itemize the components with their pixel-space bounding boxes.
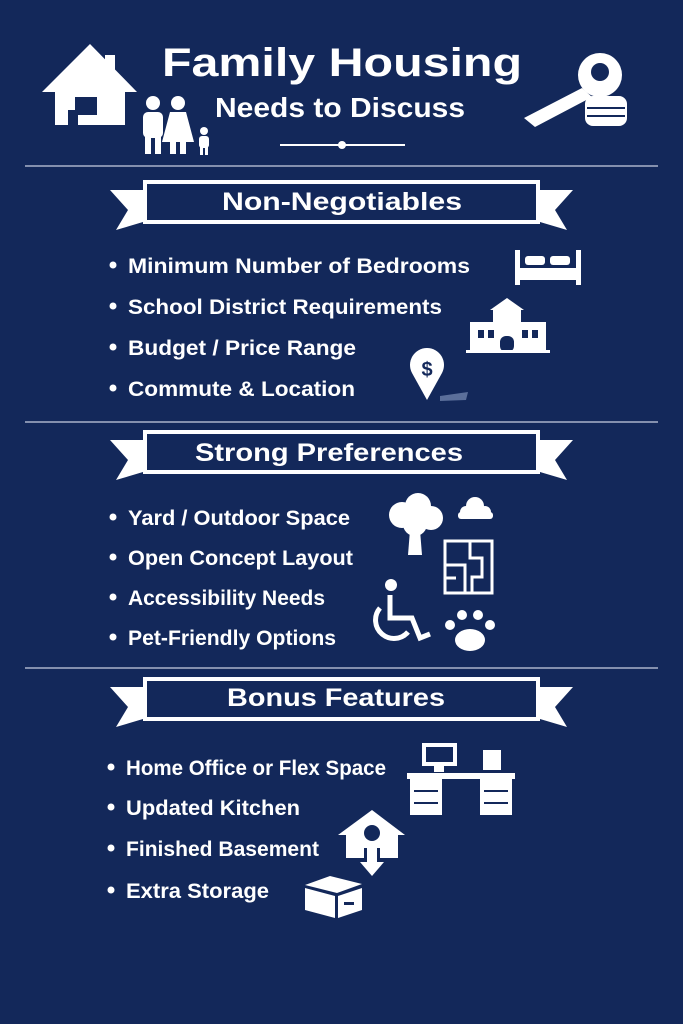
title: Family Housing bbox=[162, 41, 522, 85]
list: strong preferences: Yard / Outdoor Space bbox=[128, 507, 350, 530]
list: non-negotiables: Commute & Location bbox=[128, 378, 355, 401]
list: bonus features: Finished Basement bbox=[126, 838, 319, 861]
banner: Non-Negotiables bbox=[110, 180, 573, 230]
list: strong preferences: Accessibility Needs bbox=[128, 587, 325, 610]
title bbox=[162, 41, 522, 123]
banner: Non-Negotiables: Non-Negotiables bbox=[222, 188, 462, 216]
list: non-negotiables: School District Requirements bbox=[128, 296, 442, 319]
icon: paw bbox=[445, 610, 495, 651]
icon: school bbox=[466, 298, 550, 353]
list: strong preferences: Open Concept Layout bbox=[128, 547, 353, 570]
banner: Bonus Features: Bonus Features bbox=[227, 684, 445, 712]
icon: cloud bbox=[458, 497, 493, 519]
icon: key bbox=[524, 53, 627, 127]
list: non-negotiables: Minimum Number of Bedrooms bbox=[128, 255, 470, 278]
icon: wheelchair bbox=[376, 579, 430, 638]
icon: floor plan bbox=[445, 541, 492, 593]
banner: Strong Preferences: Strong Preferences bbox=[195, 439, 463, 467]
icon: family bbox=[143, 96, 209, 155]
title ornament bbox=[280, 141, 405, 149]
banner: Strong Preferences bbox=[110, 430, 573, 480]
list: bonus features: Updated Kitchen bbox=[126, 797, 300, 820]
list: bonus features: Home Office or Flex Space bbox=[126, 757, 386, 780]
icon: house bbox=[42, 44, 137, 125]
title: Needs to Discuss bbox=[215, 92, 465, 123]
icon: dollar pin: $ bbox=[421, 359, 433, 381]
list: strong preferences: Pet-Friendly Options bbox=[128, 627, 336, 650]
icon: bed bbox=[515, 250, 581, 285]
icon: house with arrow bbox=[338, 810, 405, 876]
icon: tree bbox=[389, 493, 443, 555]
icon: desk bbox=[407, 743, 515, 815]
list: non-negotiables bbox=[110, 255, 470, 401]
banner: Bonus Features bbox=[110, 677, 573, 727]
list: bonus features: Extra Storage bbox=[126, 880, 269, 903]
list: bonus features bbox=[108, 757, 386, 903]
list: strong preferences bbox=[110, 507, 353, 650]
icon: dollar pin bbox=[410, 348, 468, 401]
list: non-negotiables: Budget / Price Range bbox=[128, 337, 356, 360]
icon: storage box bbox=[305, 876, 362, 918]
